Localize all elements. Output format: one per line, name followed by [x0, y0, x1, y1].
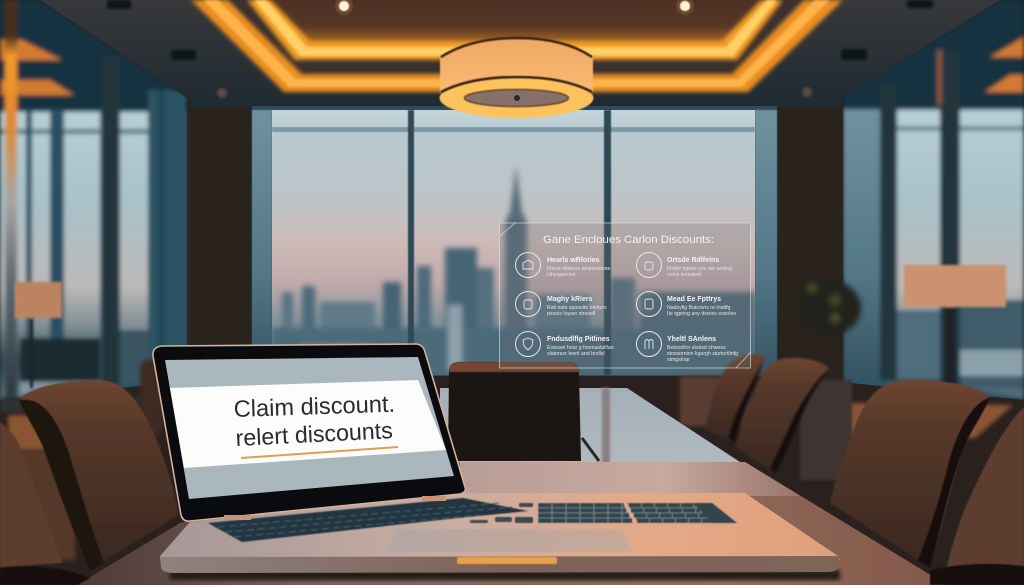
item 4: Ite tgpring any dsroes essoles — [667, 311, 736, 317]
ceiling — [40, 0, 1000, 108]
item 4: Nadsyfig Batcovrs re Inatlfg — [667, 305, 731, 311]
front table — [77, 462, 947, 585]
item 6: Betoosltor slodsd shwess — [667, 345, 726, 351]
item 1: Hearls wRlories — [547, 257, 600, 264]
glass information panel — [500, 223, 751, 368]
item 2 — [636, 252, 732, 278]
back right chairs — [705, 354, 829, 474]
item 6 — [636, 332, 738, 363]
item 5 — [516, 332, 614, 357]
item 3 — [516, 292, 607, 317]
orange pillar strip — [5, 0, 17, 400]
left front chairs — [0, 380, 178, 585]
city skyline — [272, 165, 755, 375]
screen headline: Claim discount. — [233, 392, 395, 423]
orange ceiling reflections — [0, 40, 74, 95]
gap between cove lights — [228, 0, 804, 76]
back table — [440, 388, 740, 493]
recessed brown ceiling — [260, 0, 772, 52]
right front chairs — [830, 380, 1024, 585]
item 3: pesnis luyser strosell — [547, 311, 595, 317]
item 4: Mead Ee Fpttrys — [667, 296, 721, 303]
hinged keyboard — [208, 498, 528, 542]
orange ceiling reflections — [985, 37, 1024, 92]
pendant lamp — [440, 38, 594, 118]
ceiling vents and dots — [107, 0, 933, 98]
white banner — [170, 380, 446, 468]
screen lid — [153, 344, 465, 521]
item 2: coms lenssteet — [667, 272, 702, 278]
right floor lamp — [904, 265, 1006, 385]
right windows — [843, 0, 1024, 400]
item 1: cthesperone — [547, 272, 576, 278]
item 1 — [516, 252, 611, 278]
screen headline — [233, 392, 395, 451]
laptop base — [160, 493, 840, 560]
item 5: slaterars leerit and brollsl — [547, 351, 605, 357]
pale table reflection band — [460, 462, 800, 496]
downlights — [335, 0, 694, 15]
item 3: Rail nate sponsite blehers — [547, 305, 607, 311]
front notch — [457, 557, 557, 564]
panel title: Gane Encloues Carlon Discounts: — [543, 234, 714, 246]
orange underline — [241, 447, 398, 458]
right column — [777, 100, 843, 390]
item 4 — [636, 292, 736, 317]
right keyboard blocks — [470, 503, 737, 523]
item 2: Fieller typent you ser anding — [667, 266, 732, 272]
item 2: Ortsde Rdlfelns — [667, 257, 719, 264]
laptop front lip — [160, 556, 839, 573]
item 3: Maghy kRlers — [547, 296, 593, 303]
distant city and furniture — [20, 338, 100, 386]
left windows — [0, 0, 190, 400]
potted plant — [795, 280, 861, 336]
item 5: Eoessel hoar g foomastsiflan — [547, 345, 614, 351]
window mullions — [408, 110, 611, 375]
item 1: Fiscal dfawers ampersonne — [547, 266, 611, 272]
distant city — [897, 310, 940, 378]
item 6: stossornion kgurgh sturtortlinfg — [667, 351, 738, 357]
item 5: Fndusdlflg Pitlines — [547, 336, 610, 343]
item 6: Yheltl SAnlens — [667, 336, 716, 343]
orange cove lights — [191, 0, 843, 92]
centre windows — [252, 106, 777, 376]
floor and sideboards — [0, 360, 1024, 585]
under laptop shadow — [170, 570, 840, 580]
centre chair — [448, 362, 599, 461]
laptop — [153, 344, 840, 580]
left lamp — [15, 282, 62, 388]
left column — [187, 100, 252, 350]
screen display — [165, 357, 454, 499]
item 6: stmgslrap — [667, 357, 690, 363]
trackpad — [385, 529, 633, 552]
hinge tabs — [224, 515, 251, 520]
window top transom — [272, 127, 755, 132]
screen headline: relert discounts — [235, 417, 393, 451]
